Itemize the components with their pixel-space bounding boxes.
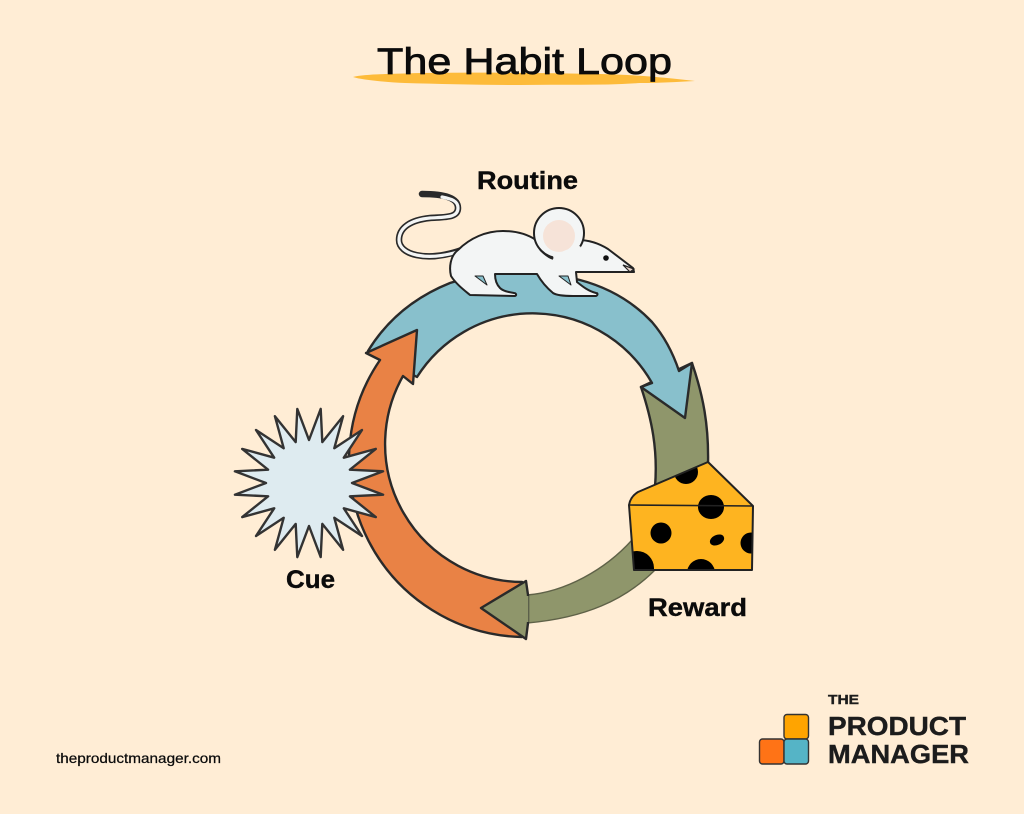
icon: burst star (235, 409, 383, 557)
mouse eye (603, 255, 609, 261)
logo blocks (760, 714, 808, 764)
mouse tail (399, 194, 464, 256)
logo wordmark: PRODUCT (828, 711, 966, 741)
icon: mouse (399, 194, 634, 296)
logo wordmark (828, 692, 969, 769)
blue routine arrow (368, 273, 692, 418)
footer url: theproductmanager.com (56, 750, 221, 766)
mouse body (450, 231, 634, 296)
logo wordmark: THE (828, 692, 859, 707)
mouse ear (534, 208, 584, 258)
mouse nose (623, 265, 634, 272)
green reward arrow: lower segment and arrowhead (481, 540, 655, 639)
title with brush underline (353, 41, 695, 85)
label: reward: Reward (648, 594, 747, 622)
icon: cheese (628, 462, 754, 571)
label: routine: Routine (477, 167, 578, 195)
orange cue arrow (349, 330, 522, 637)
logo (760, 692, 969, 769)
logo wordmark: MANAGER (828, 739, 969, 769)
green reward arrow: upper segment (641, 363, 708, 500)
title with brush underline: The Habit Loop (377, 41, 672, 82)
label: cue: Cue (286, 566, 335, 594)
mouse leg gaps (475, 276, 571, 285)
